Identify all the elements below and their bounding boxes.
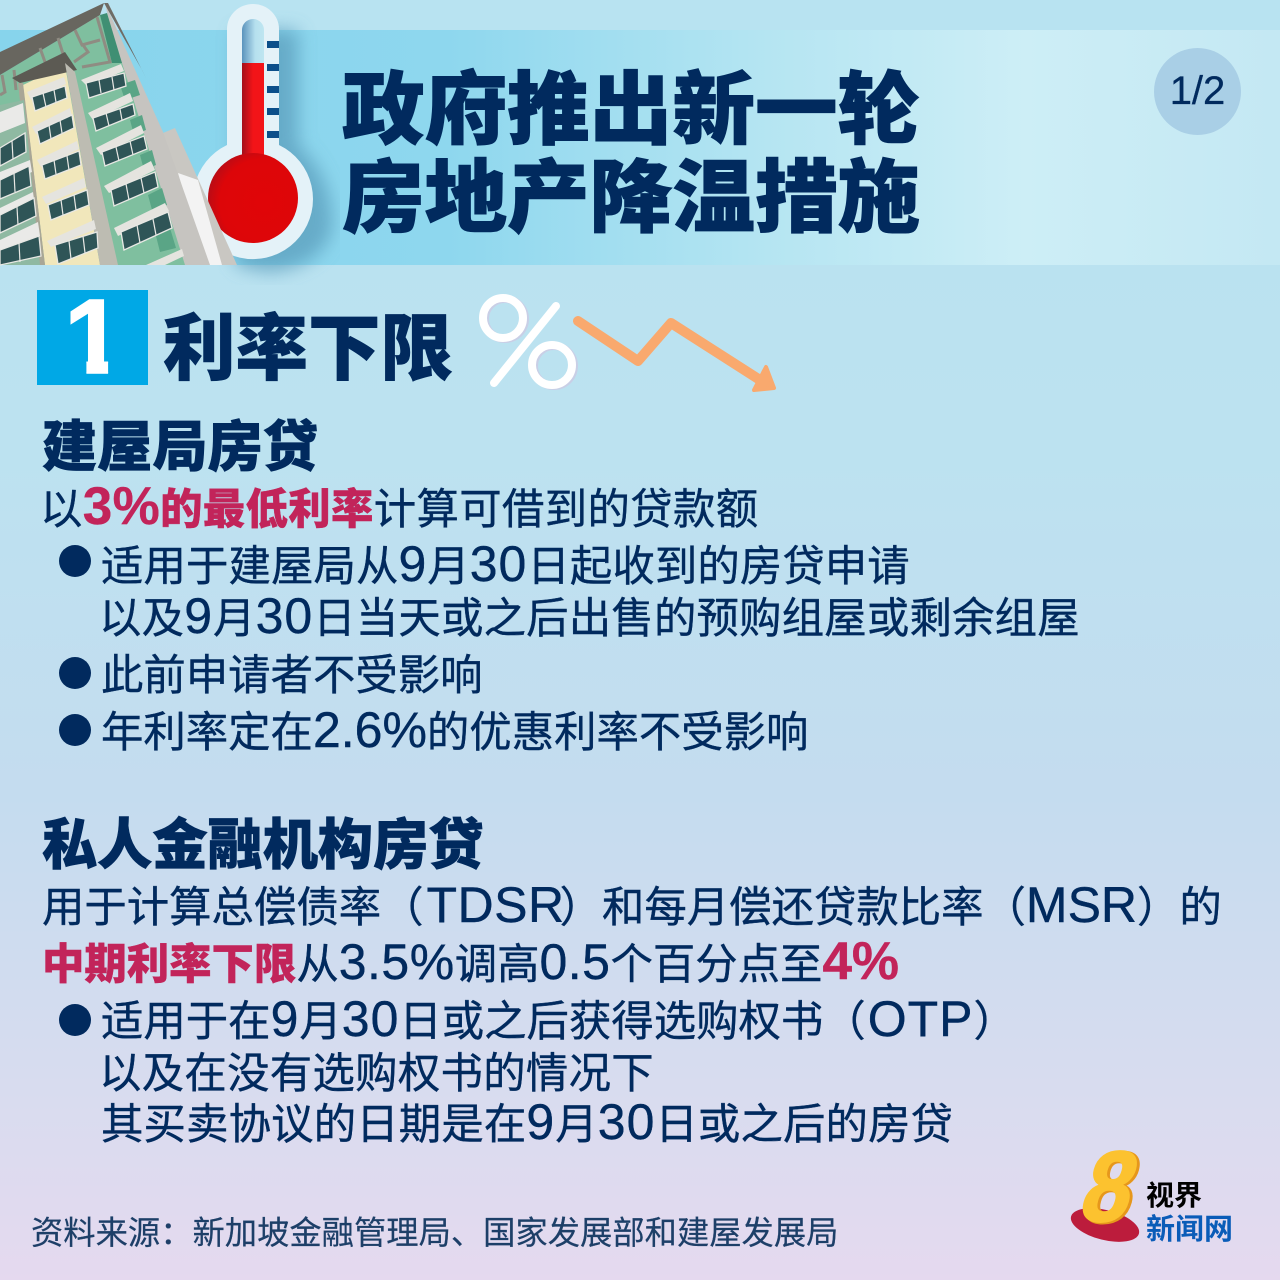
source: 资料来源：新加坡金融管理局、国家发展部和建屋发展局 (31, 1215, 838, 1251)
page badge: 1/2 (1170, 69, 1225, 113)
section: private loans (42, 814, 1222, 1150)
title: 政府推出新一轮 (342, 65, 920, 155)
description: 以3%的最低利率计算可借到的贷款额 (40, 477, 758, 536)
icon: percent and falling arrow (479, 294, 776, 392)
description line 1: 用于计算总偿债率（TDSR）和每月偿还贷款比率（MSR）的 (42, 877, 1222, 933)
bullet text continued: 其买卖协议的日期是在9月30日或之后的房贷 (101, 1094, 953, 1150)
bullet (59, 545, 91, 577)
bullet (59, 1004, 91, 1036)
thermometer (193, 4, 332, 272)
bullet (59, 657, 91, 689)
logo (1070, 1145, 1233, 1246)
header band (0, 30, 1280, 265)
header illustration: thermometer and building (0, 3, 340, 282)
bullet text: 年利率定在2.6%的优惠利率不受影响 (101, 702, 808, 758)
section number (37, 290, 148, 385)
description line 2: 中期利率下限从3.5%调高0.5个百分点至4% (42, 932, 899, 991)
bullet (59, 714, 91, 746)
bullet text: 适用于在9月30日或之后获得选购权书（OTP） (101, 991, 1016, 1047)
logo text: 视界 (1146, 1180, 1202, 1211)
subheading: 建屋局房贷 (42, 416, 318, 478)
title: 房地产降温措施 (342, 153, 920, 243)
page badge (1154, 48, 1241, 135)
bullet text: 此前申请者不受影响 (101, 652, 483, 699)
section: HDB loans (40, 416, 1080, 758)
subheading: 私人金融机构房贷 (42, 814, 484, 876)
logo text blue: 新闻网 (1146, 1214, 1233, 1246)
bullet text: 适用于建屋局从9月30日起收到的房贷申请 (101, 536, 910, 592)
section heading: 利率下限 (163, 309, 453, 390)
bullet text continued: 以及在没有选购权书的情况下 (99, 1050, 654, 1097)
title (342, 65, 920, 243)
bullet text continued: 以及9月30日当天或之后出售的预购组屋或剩余组屋 (99, 588, 1080, 644)
building photo (0, 3, 237, 265)
